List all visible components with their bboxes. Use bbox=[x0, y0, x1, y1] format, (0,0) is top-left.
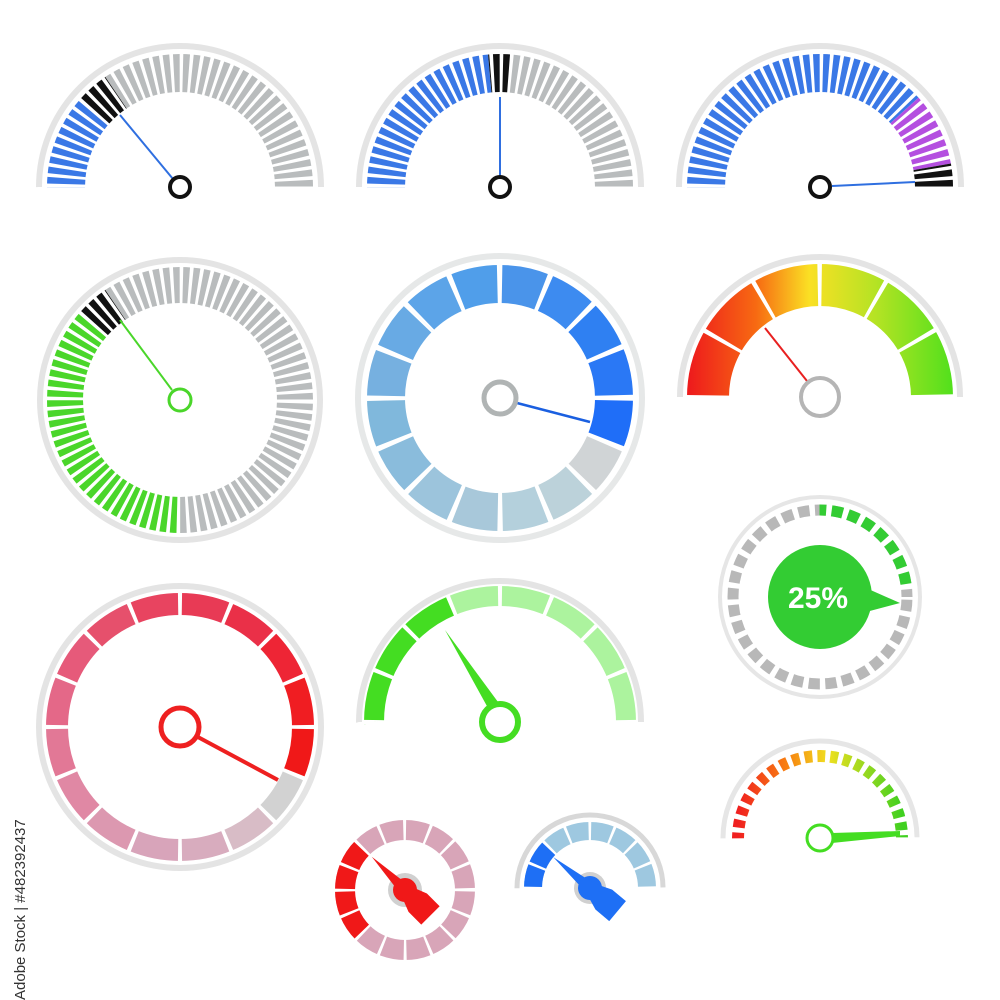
gauge 8: red pink segmented circle bbox=[39, 586, 321, 868]
gauge 11: small blue semicircle bbox=[517, 815, 663, 961]
gauge 12: small rainbow dashed semicircle bbox=[723, 741, 917, 935]
gauge 10: small red pink circle bbox=[345, 830, 465, 950]
gauge 4: green tick circle bbox=[40, 260, 320, 540]
gauge 2: blue tick semicircle half bbox=[359, 46, 641, 328]
gauge 3: blue purple tick semicircle bbox=[679, 46, 961, 328]
gauge 5: blue segmented circle bbox=[358, 256, 642, 540]
gauge 1: blue tick semicircle bbox=[39, 46, 321, 328]
side credit text: Adobe Stock | #482392437 bbox=[12, 819, 29, 1000]
gauge 6: colour gradient semicircle bbox=[680, 257, 960, 537]
gauge 9: green segmented semicircle bbox=[359, 581, 641, 863]
gauge 7: 25% dashed circle bbox=[720, 497, 920, 697]
label 25%: 25% bbox=[788, 582, 848, 615]
pointer bbox=[866, 588, 900, 612]
